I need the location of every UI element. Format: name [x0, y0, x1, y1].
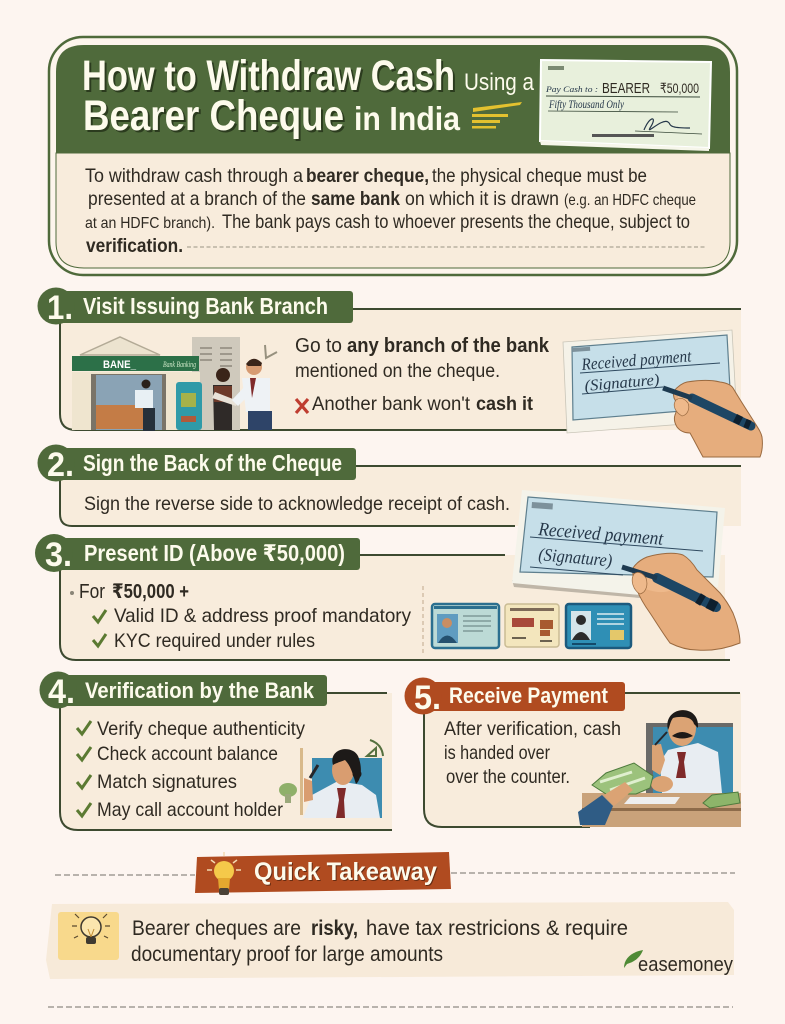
text: step 1: any branch of the bank [347, 335, 550, 357]
heading: step 4: 4. [48, 673, 75, 711]
intro text: the physical cheque must be [432, 165, 647, 187]
text: takeaway: documentary proof for large amounts [131, 943, 443, 966]
title: Using a [464, 69, 535, 96]
text: takeaway [131, 917, 628, 966]
text: step 5: is handed over [444, 742, 550, 764]
text: step 3 list: Valid ID & address proof mandatory [114, 605, 411, 627]
panel: step 2 [38, 444, 741, 526]
illustration: bank branch: BANE_ [103, 359, 137, 371]
illustration: signed cheque 2: Received payment [537, 519, 665, 550]
intro text: at an HDFC branch). [85, 215, 215, 232]
heading: step 2 [38, 444, 356, 484]
title [82, 52, 535, 142]
text: step 1: mentioned on the cheque. [295, 360, 500, 382]
illustration: signed cheque 1: Received payment [580, 346, 693, 374]
heading: step 4: Verification by the Bank [85, 678, 315, 703]
text: step 3 list [70, 581, 411, 652]
intro text: on which it is drawn [405, 188, 559, 210]
heading: step 1: 1. [47, 289, 73, 327]
panel: step 5 [404, 678, 741, 827]
intro text: The bank pays cash to whoever presents the cheque, subject to [222, 211, 690, 233]
illustration: bank officer on phone [279, 740, 383, 818]
icon: ID card 2 [505, 604, 559, 647]
text: step 1: Go to [295, 335, 342, 357]
text: step 2: Sign the reverse side to acknowledge receipt of cash. [84, 493, 510, 515]
panel: takeaway [46, 902, 734, 979]
title: Bearer Cheque [85, 94, 346, 142]
intro text: presented at a branch of the [88, 188, 306, 210]
icon: light bulb [207, 852, 241, 895]
intro text: bearer cheque, [306, 165, 429, 187]
heading: step 3: Present ID (Above ₹50,000) [84, 540, 345, 566]
banner: quick takeaway [195, 852, 451, 895]
icon: arrow marks [265, 345, 277, 358]
intro text: same bank [311, 188, 400, 210]
heading: step 1: Visit Issuing Bank Branch [83, 293, 328, 319]
text: step 4 list: Match signatures [97, 771, 237, 793]
text: step 4 list: Verify cheque authenticity [97, 718, 305, 740]
heading: step 2: 2. [47, 446, 74, 484]
title: How to Withdraw Cash [82, 52, 455, 100]
panel: step 1 [38, 288, 741, 431]
text: step 5: over the counter. [446, 766, 570, 788]
text: takeaway: have tax restricions & require [366, 917, 628, 940]
intro text: verification. [86, 235, 183, 257]
panel: step 3 [35, 534, 730, 660]
heading: step 4 [40, 672, 327, 711]
banner: quick takeaway: Quick Takeaway [254, 858, 437, 886]
title: in India [354, 100, 461, 137]
illustration: cashier handing over money [578, 710, 741, 827]
text: step 1 [295, 335, 550, 415]
illustration: signed cheque 1: (Signature) [584, 372, 660, 395]
icon: ID card 1 [432, 604, 499, 648]
heading: step 3: 3. [45, 536, 72, 574]
intro text: (e.g. an HDFC cheque [564, 192, 696, 209]
text: step 4 list [77, 718, 305, 821]
logo: easemoney: easemoney [638, 954, 733, 976]
heading: step 5 [404, 678, 625, 717]
panel: step 4 [40, 672, 392, 830]
text: step 5: After verification, cash [444, 718, 621, 740]
illustration: signed cheque 2: (Signature) [538, 544, 613, 571]
text: step 5 [444, 718, 621, 788]
text: step 4 list: Check account balance [97, 743, 278, 765]
intro text [85, 165, 705, 257]
text: step 3 list: For [79, 581, 105, 603]
text: step 3 list: KYC required under rules [114, 630, 315, 652]
icon: red cross [296, 399, 308, 413]
text: takeaway: risky, [311, 917, 358, 940]
illustration: bearer cheque: BEARER [602, 80, 650, 97]
illustration: bank branch [72, 337, 277, 431]
illustration: bearer cheque [540, 60, 711, 151]
icon: hand and pen [663, 380, 762, 457]
icon: hand and pen [622, 553, 740, 650]
panel: header [49, 37, 737, 275]
illustration: signed cheque 1 [563, 330, 762, 457]
illustration: bearer cheque: Pay Cash to : [545, 85, 598, 94]
logo: easemoney [624, 950, 733, 976]
banner: quick takeaway: Quick Takeaway [255, 859, 438, 887]
title: How to Withdraw Cash [84, 54, 457, 102]
intro text: To withdraw cash through a [85, 165, 303, 187]
text: step 3 list: ₹50,000 + [112, 581, 189, 603]
arm [578, 795, 613, 825]
illustration: signed cheque 2 [512, 490, 740, 650]
icon: bulb on yellow patch [58, 912, 119, 960]
icon: curved arrow [367, 740, 383, 756]
icon: gold speed lines [472, 102, 522, 128]
title: Bearer Cheque [83, 92, 344, 140]
heading: step 3 [35, 534, 360, 574]
text: takeaway: Bearer cheques are [132, 917, 301, 940]
illustration: bearer cheque: ₹50,000 [660, 80, 699, 96]
heading: step 5: 5. [414, 679, 441, 717]
illustration: bearer cheque: Fifty Thousand Only [548, 97, 625, 111]
heading: step 2: Sign the Back of the Cheque [83, 450, 342, 476]
text: step 1: Another bank won't [312, 393, 471, 415]
text: step 1: cash it [476, 393, 533, 415]
heading: step 5: Receive Payment [449, 683, 609, 708]
text: step 4 list: May call account holder [97, 799, 283, 821]
heading: step 1 [38, 288, 353, 327]
illustration: bank branch: Bank Banking [163, 360, 196, 369]
icon: cash bundles [592, 763, 653, 794]
icon: ID card 3 [566, 604, 631, 648]
decorative dashes [48, 873, 735, 1007]
